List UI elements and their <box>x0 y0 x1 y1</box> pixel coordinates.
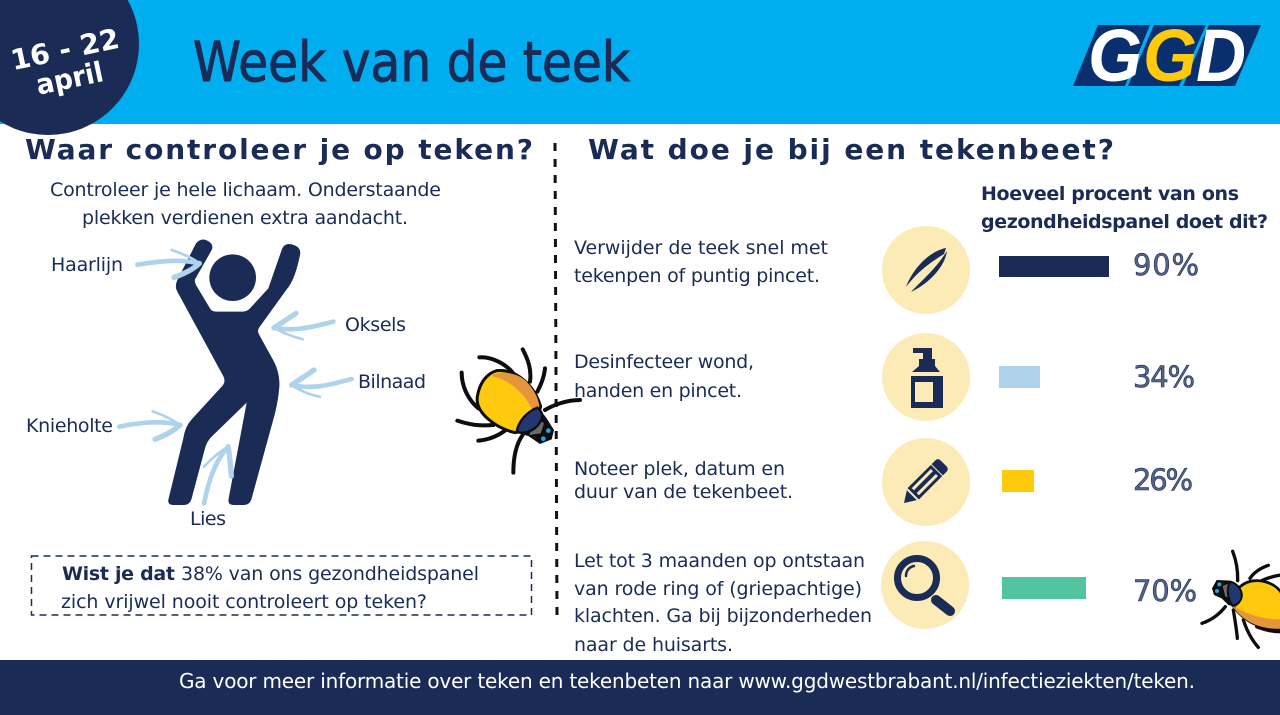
date badge: 16 - 22 <box>8 22 122 77</box>
body figure with arrows <box>119 240 352 505</box>
step text: Noteer plek, datum en <box>574 458 785 480</box>
bar 90% <box>999 256 1109 277</box>
value 90%: 90% <box>1133 248 1199 282</box>
value 34%: 34% <box>1133 360 1195 394</box>
step text <box>574 458 793 503</box>
heading: panel question: Hoeveel procent van ons <box>981 183 1239 205</box>
step text: handen en pincet. <box>574 380 742 402</box>
step text: van rode ring of (griepachtige) <box>574 578 862 600</box>
callout: zich vrijwel nooit controleert op teken? <box>61 591 427 613</box>
step text <box>574 550 872 656</box>
logo: GGD: D <box>1196 14 1246 97</box>
value 70%: 70% <box>1133 574 1197 608</box>
date badge: april <box>33 55 106 102</box>
footer text: Ga voor meer informatie over teken en tekenbeten naar www.ggdwestbrabant.nl/infectieziekten/teken. <box>179 669 1195 693</box>
body labels: Bilnaad <box>358 371 426 393</box>
title: Week van de teek <box>193 30 630 94</box>
icon: tweezers <box>882 226 970 314</box>
step text: naar de huisarts. <box>574 634 733 656</box>
row 3: note <box>574 438 1193 526</box>
vertical divider <box>555 143 557 616</box>
step text: Desinfecteer wond, <box>574 351 754 373</box>
bar 70% <box>1002 577 1086 599</box>
bar 34% <box>999 366 1040 388</box>
icon: bottle <box>882 333 970 421</box>
step text <box>574 351 754 402</box>
step text: klachten. Ga bij bijzonderheden <box>574 605 872 627</box>
heading: panel question <box>981 183 1268 233</box>
icon: tick at right edge <box>1202 551 1280 647</box>
heading: panel question: gezondheidspanel doet dit? <box>981 211 1268 233</box>
body labels <box>26 254 426 530</box>
step text: Let tot 3 maanden op ontstaan <box>574 550 865 572</box>
logo: GGD: G <box>1088 14 1142 97</box>
body labels: Haarlijn <box>51 254 123 276</box>
arrows <box>119 250 352 503</box>
callout: 38% van ons gezondheidspanel <box>181 563 479 585</box>
date badge <box>0 0 139 135</box>
callout <box>32 556 532 615</box>
icon: tick walking across divider <box>457 349 580 473</box>
heading: left: Waar controleer je op teken? <box>25 133 533 166</box>
header band <box>0 0 1280 124</box>
intro text: plekken verdienen extra aandacht. <box>82 207 408 229</box>
row 4: watch symptoms <box>574 541 1197 656</box>
value 26%: 26% <box>1133 463 1193 497</box>
row 1: remove tick <box>574 226 1199 314</box>
figure silhouette <box>168 240 300 505</box>
step text: tekenpen of puntig pincet. <box>574 265 820 287</box>
body labels: Lies <box>190 508 226 530</box>
icon: pencil <box>882 438 970 526</box>
logo: GGD <box>1073 14 1261 97</box>
intro text <box>50 179 441 229</box>
icon: magnifier <box>881 541 969 629</box>
step text: Verwijder de teek snel met <box>574 237 828 259</box>
step text: duur van de tekenbeet. <box>574 481 793 503</box>
logo: GGD: G <box>1143 14 1197 97</box>
callout: Wist je dat <box>62 563 175 585</box>
footer band <box>0 660 1280 715</box>
body labels: Oksels <box>345 314 406 336</box>
body labels: Knieholte <box>26 415 113 437</box>
bar 26% <box>1002 470 1034 492</box>
step text <box>574 237 828 287</box>
heading: right: Wat doe je bij een tekenbeet? <box>588 133 1114 166</box>
row 2: disinfect <box>574 333 1195 421</box>
intro text: Controleer je hele lichaam. Onderstaande <box>50 179 441 201</box>
